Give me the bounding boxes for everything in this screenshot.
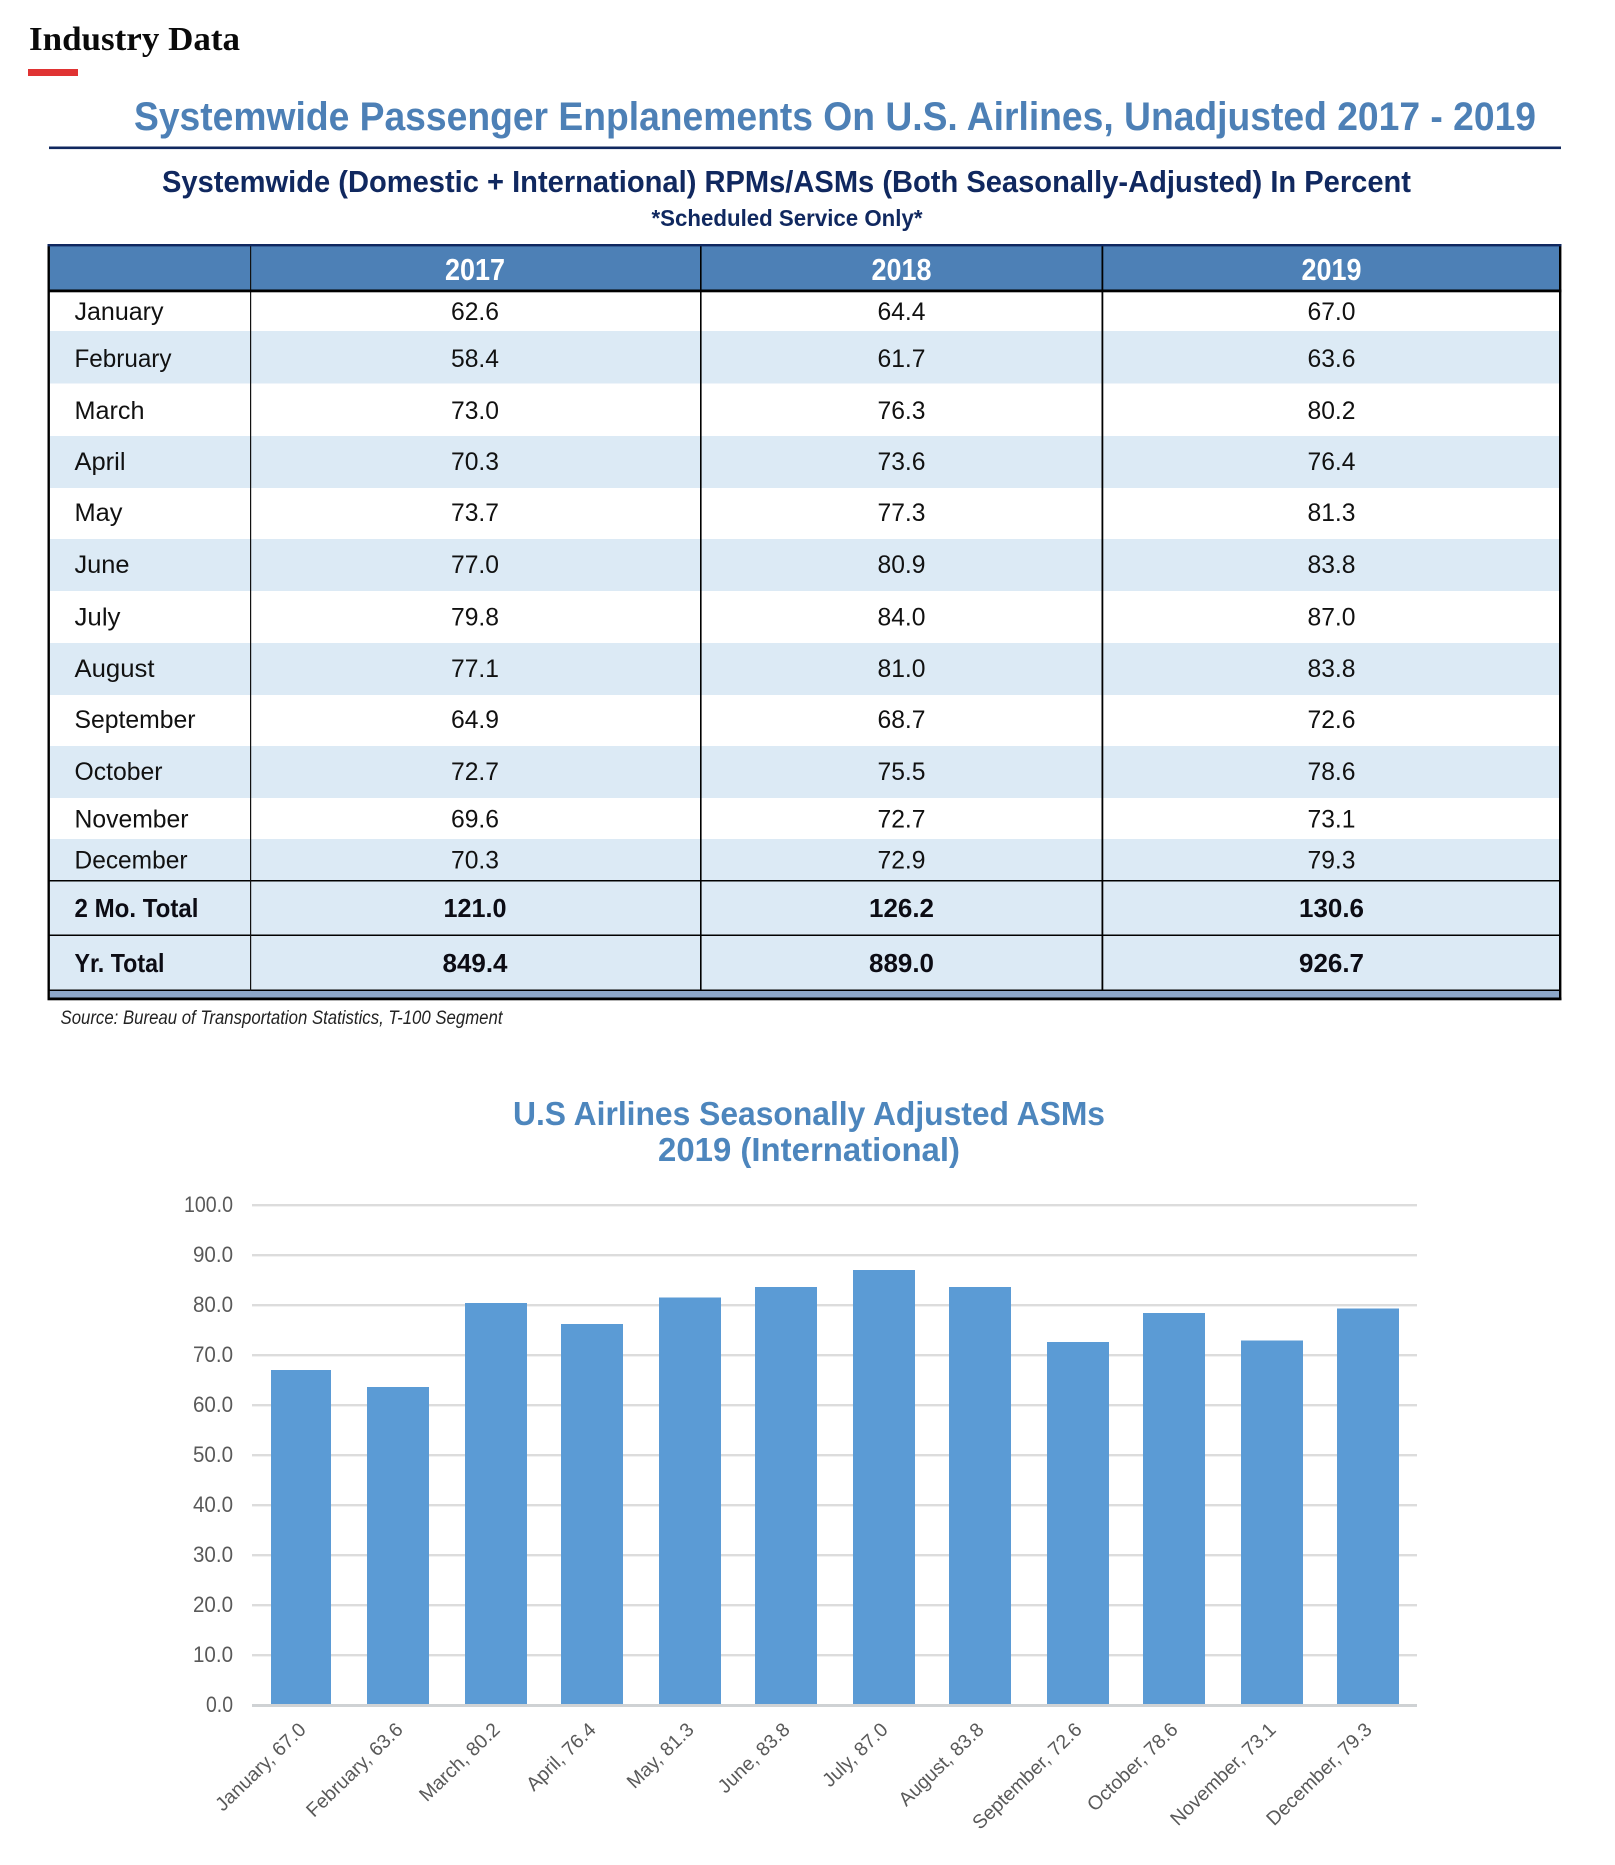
row: February: 63.6 [1308, 345, 1356, 373]
row: December [74, 846, 1356, 874]
table header row: 2018 [872, 252, 932, 287]
row: 2 Mo. Total: 2 Mo. Total [74, 893, 198, 923]
x axis labels: April, 76.4 [522, 1719, 601, 1796]
table header row: 2017 [445, 252, 505, 287]
row: May: May [74, 499, 123, 527]
row: October: October [74, 758, 162, 786]
row: Yr. Total: 926.7 [1299, 948, 1364, 978]
y axis labels: 100.0 [184, 1192, 233, 1217]
x axis labels: September, 72.6 [968, 1719, 1086, 1834]
y axis labels: 50.0 [193, 1442, 233, 1467]
row: March: 76.3 [878, 397, 926, 425]
row: November: 73.1 [1308, 806, 1356, 834]
row: August: 81.0 [878, 655, 926, 683]
x axis labels [211, 1719, 1376, 1834]
row: November: 69.6 [451, 806, 499, 834]
x axis labels: October, 78.6 [1083, 1719, 1182, 1816]
x axis labels: January, 67.0 [211, 1719, 311, 1816]
row: July: 79.8 [451, 604, 499, 632]
chart title: 2019 (International) [658, 1131, 960, 1168]
table header row: 2019 [1302, 252, 1362, 287]
row: March: 73.0 [451, 397, 499, 425]
x axis labels: June, 83.8 [714, 1719, 794, 1798]
row: May [74, 499, 1356, 527]
row: February: February [74, 345, 172, 373]
row: August [74, 655, 1356, 683]
row: April: April [74, 448, 126, 476]
chart title: U.S Airlines Seasonally Adjusted ASMs [513, 1095, 1105, 1132]
x axis labels: December, 79.3 [1262, 1719, 1376, 1830]
row: June [74, 551, 1356, 579]
x axis labels: May, 81.3 [623, 1719, 698, 1793]
row: June: June [74, 551, 130, 579]
row: November [74, 806, 1356, 834]
x axis labels: July, 87.0 [818, 1719, 893, 1792]
row: 2 Mo. Total: 121.0 [444, 893, 506, 923]
row: 2 Mo. Total: 126.2 [869, 893, 934, 923]
row: April: 70.3 [451, 448, 499, 476]
bar chart [184, 1192, 1417, 1834]
row: Yr. Total [74, 948, 1364, 978]
y axis labels: 0.0 [206, 1692, 233, 1717]
row: September: 64.9 [451, 706, 499, 734]
row: October [74, 758, 1356, 786]
row: September [74, 706, 1356, 734]
y axis labels: 30.0 [193, 1542, 233, 1567]
table subtitle: Systemwide (Domestic + International) RPMs/ASMs (Both Seasonally-Adjusted) In Percent [162, 164, 1411, 199]
row: December: 70.3 [451, 846, 499, 874]
row: December: 72.9 [878, 846, 926, 874]
row: June: 80.9 [878, 551, 926, 579]
y axis labels: 70.0 [193, 1342, 233, 1367]
row: May: 73.7 [451, 499, 499, 527]
row: August: 83.8 [1308, 655, 1356, 683]
row: January: 62.6 [451, 298, 499, 326]
y axis labels: 60.0 [193, 1392, 233, 1417]
row: April: 73.6 [878, 448, 926, 476]
row: March: 80.2 [1308, 397, 1356, 425]
table header row [48, 245, 1560, 291]
row: July: 84.0 [878, 604, 926, 632]
row: December: 79.3 [1308, 846, 1356, 874]
chart title [513, 1095, 1105, 1168]
row: December: December [74, 846, 188, 874]
row: September: 68.7 [878, 706, 926, 734]
y axis labels: 10.0 [193, 1642, 233, 1667]
alternating row shading [50, 331, 1559, 990]
row: April: 76.4 [1308, 448, 1356, 476]
row: February [74, 345, 1356, 373]
row: August: August [74, 655, 155, 683]
section label: Industry Data: Industry Data [29, 21, 240, 58]
row: January [74, 298, 1356, 326]
row: September: September [74, 706, 196, 734]
row: October: 72.7 [451, 758, 499, 786]
source note: Source: Bureau of Transportation Statistics, T-100 Segment [60, 1008, 503, 1029]
y axis labels: 90.0 [193, 1242, 233, 1267]
row: November: November [74, 806, 188, 834]
row: June: 77.0 [451, 551, 499, 579]
bars [271, 1270, 1399, 1704]
row: Yr. Total: 889.0 [869, 948, 934, 978]
row: February: 58.4 [451, 345, 499, 373]
x axis labels: August, 83.8 [894, 1719, 988, 1811]
data table [48, 244, 1562, 1000]
section label: Industry Data [28, 21, 240, 76]
x axis labels: February, 63.6 [302, 1719, 407, 1822]
row: May: 77.3 [878, 499, 926, 527]
row: July [74, 604, 1356, 632]
row: Yr. Total: Yr. Total [74, 948, 164, 978]
row: July: July [74, 604, 121, 632]
row: October: 78.6 [1308, 758, 1356, 786]
row: August: 77.1 [451, 655, 499, 683]
row: March: March [74, 397, 144, 425]
row: September: 72.6 [1308, 706, 1356, 734]
x axis labels: November, 73.1 [1166, 1719, 1280, 1830]
row: 2 Mo. Total [74, 893, 1364, 923]
row: May: 81.3 [1308, 499, 1356, 527]
row: January: 67.0 [1308, 298, 1356, 326]
title: Systemwide Passenger Enplanements On U.S. Airlines, Unadjusted 2017 - 2019 [134, 95, 1536, 139]
row: April [74, 448, 1356, 476]
y axis labels: 20.0 [193, 1592, 233, 1617]
y axis labels [184, 1192, 233, 1717]
row: October: 75.5 [878, 758, 926, 786]
row: Yr. Total: 849.4 [442, 948, 508, 978]
row: 2 Mo. Total: 130.6 [1299, 893, 1364, 923]
row: July: 87.0 [1308, 604, 1356, 632]
row: January: January [74, 298, 164, 326]
row: November: 72.7 [878, 806, 926, 834]
y axis labels: 80.0 [193, 1292, 233, 1317]
row: March [74, 397, 1356, 425]
table note: *Scheduled Service Only* [652, 205, 923, 231]
row: June: 83.8 [1308, 551, 1356, 579]
x axis labels: March, 80.2 [415, 1719, 504, 1806]
row: January: 64.4 [878, 298, 926, 326]
y axis labels: 40.0 [193, 1492, 233, 1517]
row: February: 61.7 [878, 345, 926, 373]
